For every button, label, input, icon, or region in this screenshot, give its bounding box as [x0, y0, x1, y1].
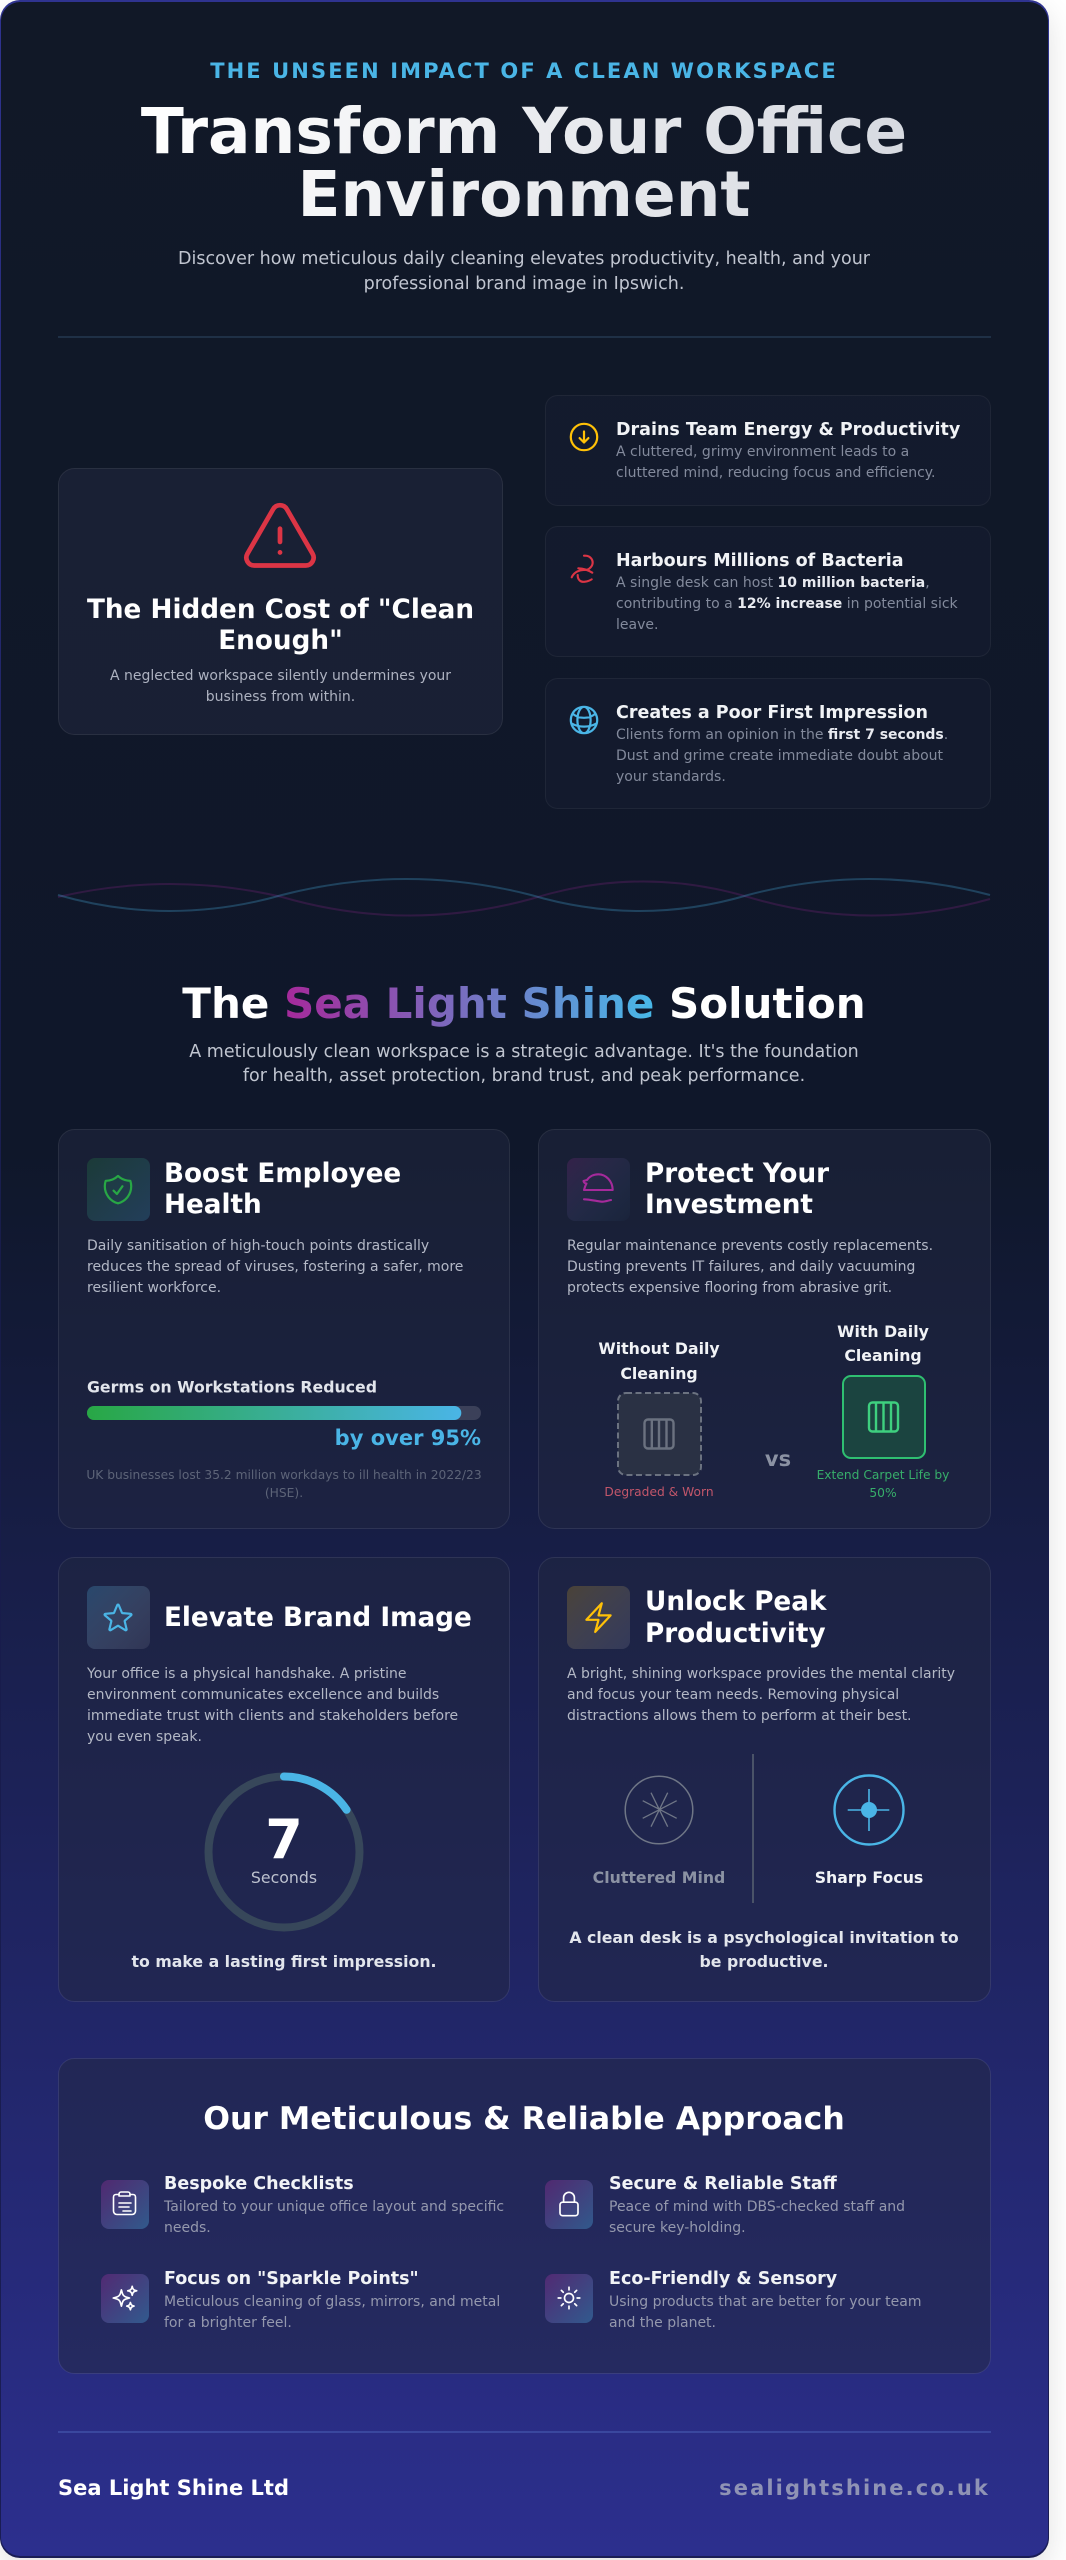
panel heading: Our Meticulous & Reliable Approach: [203, 2101, 845, 2137]
eyebrow: THE UNSEEN IMPACT OF A CLEAN WORKSPACE: [210, 59, 838, 83]
comparison: without cleaning: Degraded & Worn: [604, 1485, 714, 1499]
card heading: Investment: [645, 1190, 813, 1220]
feature: secure staff: [545, 2174, 905, 2236]
icon: bolt: [567, 1586, 630, 1649]
card text: A bright, shining workspace provides the mental clarity: [567, 1666, 955, 1682]
card text: Dusting prevents IT failures, and daily vacuuming: [567, 1259, 915, 1275]
ring chart: 7 seconds: 7: [265, 1808, 303, 1871]
item: first impression: [546, 678, 990, 808]
comparison: with cleaning: Cleaning: [844, 1346, 922, 1365]
feature: sparkle points: for a brighter feel.: [164, 2315, 292, 2331]
comparison: with cleaning: 50%: [869, 1486, 897, 1500]
icon: cluttered mind: [593, 1776, 725, 1887]
card text: resilient workforce.: [87, 1280, 221, 1296]
card caption: be productive.: [700, 1952, 828, 1971]
feature: eco friendly: Eco-Friendly & Sensory: [609, 2269, 838, 2289]
item: bacteria: [546, 526, 990, 656]
card text: you even speak.: [87, 1729, 202, 1745]
comparison: without cleaning: Without Daily: [598, 1339, 720, 1358]
card text: Your office is a physical handshake. A pristine: [86, 1666, 407, 1682]
title: Transform Your Office: [141, 95, 907, 168]
panel: protect investment: [538, 1130, 990, 1528]
icon: arrow down circle: [571, 424, 597, 450]
ring caption: to make a lasting first impression.: [131, 1952, 437, 1971]
section subtitle: for health, asset protection, brand trust, and peak performance.: [243, 1066, 805, 1086]
progress bar: germs reduced: [87, 1378, 481, 1450]
panel: approach: [58, 2058, 990, 2374]
comparison: without cleaning: Cleaning: [620, 1364, 698, 1383]
card text: reduces the spread of viruses, fostering a safer, more: [87, 1259, 463, 1275]
item text: Dust and grime create immediate doubt about: [616, 748, 944, 764]
subtitle: professional brand image in Ipswich.: [364, 274, 684, 294]
icon: cluttered mind: Cluttered Mind: [593, 1868, 725, 1887]
card footnote: UK businesses lost 35.2 million workdays to ill health in 2022/23: [86, 1468, 482, 1482]
comparison: without cleaning: [598, 1339, 720, 1499]
feature: secure staff: Secure & Reliable Staff: [609, 2174, 838, 2194]
progress bar: germs reduced: Germs on Workstations Reduced: [87, 1378, 377, 1396]
icon: sharp focus: [815, 1776, 923, 1887]
card heading: Boost Employee: [164, 1159, 401, 1189]
card heading: Elevate Brand Image: [164, 1603, 472, 1633]
feature: eco friendly: [545, 2269, 921, 2331]
card text: Daily sanitisation of high-touch points drastically: [87, 1238, 429, 1254]
item text: leave.: [616, 617, 658, 633]
header: [141, 59, 907, 294]
icon: cleaning dome: [567, 1158, 630, 1221]
item heading: Creates a Poor First Impression: [616, 703, 928, 723]
item heading: Harbours Millions of Bacteria: [616, 551, 904, 571]
wave divider: [58, 879, 990, 916]
vs label: vs: [765, 1447, 791, 1471]
card footnote: (HSE).: [265, 1486, 303, 1500]
feature: eco friendly: Using products that are better for your team: [609, 2294, 921, 2310]
icon: shield: [87, 1158, 150, 1221]
feature: checklists: [101, 2174, 504, 2236]
feature: checklists: needs.: [164, 2220, 211, 2236]
item text: cluttered mind, reducing focus and efficiency.: [616, 465, 936, 481]
panel text: business from within.: [206, 689, 355, 705]
subtitle: Discover how meticulous daily cleaning elevates productivity, health, and your: [178, 249, 871, 269]
panel: brand image: [58, 1558, 510, 2002]
icon: sharp focus: Sharp Focus: [815, 1868, 923, 1887]
item: drains energy: [546, 396, 990, 506]
feature: checklists: Tailored to your unique office layout and specific: [163, 2199, 504, 2215]
card caption: A clean desk is a psychological invitation to: [569, 1928, 959, 1947]
item text: A cluttered, grimy environment leads to a: [616, 444, 909, 460]
card heading: Unlock Peak: [645, 1587, 827, 1617]
title: Environment: [297, 158, 751, 231]
item text: contributing to a 12% increase in potential sick: [616, 596, 958, 612]
card text: distractions allows them to perform at their best.: [567, 1708, 912, 1724]
icon: bacteria: [572, 556, 593, 582]
footer: [58, 2476, 990, 2500]
card text: immediate trust with clients and stakeholders before: [87, 1708, 458, 1724]
icon: globe: [571, 707, 597, 733]
progress bar: germs reduced: by over 95%: [335, 1426, 481, 1450]
feature: sparkle points: Meticulous cleaning of glass, mirrors, and metal: [164, 2294, 500, 2310]
ring chart: 7 seconds: Seconds: [251, 1868, 317, 1887]
panel heading: Enough": [218, 626, 343, 656]
icon: warning triangle: [246, 505, 314, 566]
comparison: with cleaning: With Daily: [837, 1322, 929, 1341]
panel: hidden cost: [58, 468, 502, 734]
card text: protects expensive flooring from abrasive grit.: [567, 1280, 892, 1296]
company name: Sea Light Shine Ltd: [58, 2476, 289, 2500]
item text: your standards.: [616, 769, 726, 785]
feature: checklists: Bespoke Checklists: [164, 2174, 354, 2194]
card heading: Productivity: [645, 1619, 826, 1649]
section subtitle: A meticulously clean workspace is a strategic advantage. It's the foundation: [189, 1042, 859, 1062]
comparison: with cleaning: Extend Carpet Life by: [817, 1468, 949, 1482]
panel heading: The Hidden Cost of "Clean: [87, 595, 474, 625]
card text: environment communicates excellence and builds: [87, 1687, 439, 1703]
item text: Clients form an opinion in the first 7 seconds.: [616, 727, 948, 743]
item text: A single desk can host 10 million bacteria,: [616, 575, 930, 591]
section title: The Sea Light Shine Solution: [182, 979, 866, 1028]
ring chart: 7 seconds: [208, 1776, 360, 1928]
card text: and focus your team needs. Removing physical: [567, 1687, 899, 1703]
divider line: [752, 1754, 754, 1903]
card text: Regular maintenance prevents costly replacements.: [567, 1238, 933, 1254]
panel text: A neglected workspace silently undermines your: [110, 668, 451, 684]
panel: employee health: [58, 1130, 510, 1528]
card heading: Protect Your: [645, 1159, 829, 1189]
icon: star: [87, 1586, 150, 1649]
comparison: with cleaning: [817, 1322, 949, 1500]
solution heading: [182, 979, 866, 1086]
feature: secure staff: Peace of mind with DBS-checked staff and: [609, 2199, 905, 2215]
feature: sparkle points: Focus on "Sparkle Points": [164, 2269, 419, 2289]
feature: secure staff: secure key-holding.: [609, 2220, 746, 2236]
website: sealightshine.co.uk: [719, 2476, 990, 2500]
item heading: Drains Team Energy & Productivity: [616, 420, 961, 440]
feature: eco friendly: and the planet.: [609, 2315, 716, 2331]
panel: peak productivity: [538, 1558, 990, 2002]
card heading: Health: [164, 1190, 262, 1220]
feature: sparkle points: [101, 2269, 500, 2331]
